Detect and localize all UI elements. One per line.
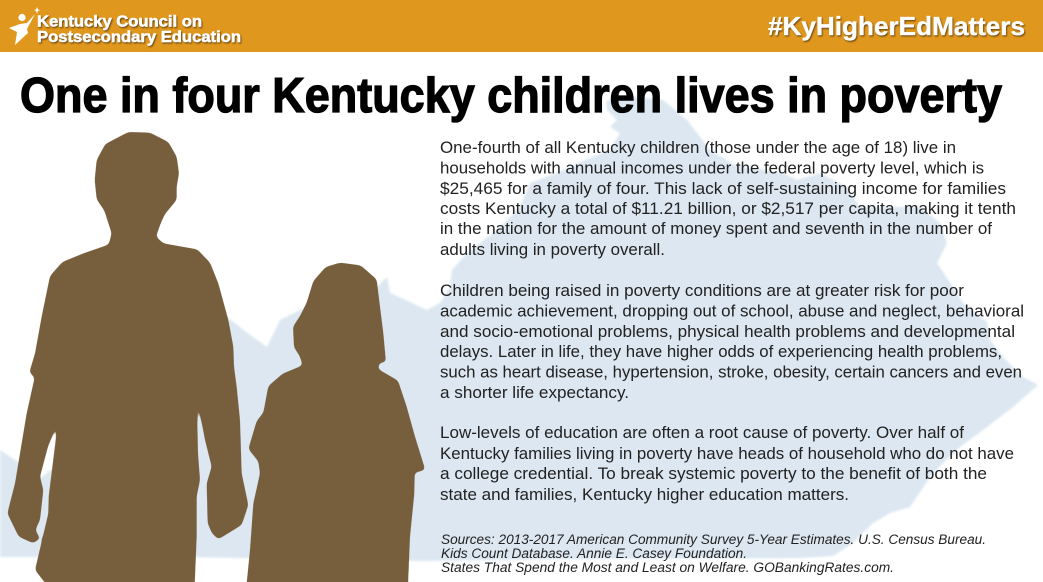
logo wordmark: Kentucky Council on bbox=[37, 14, 202, 30]
paragraph: risks for children: and socio-emotional problems, physical health problems and developmental bbox=[440, 323, 1015, 341]
paragraph: risks for children: delays. Later in life, they have higher odds of experiencing health problems, bbox=[440, 343, 1002, 361]
paragraph: risks for children: Children being raised in poverty conditions are at greater risk for poor bbox=[440, 282, 965, 300]
paragraph: education as root cause: Low-levels of education are often a root cause of poverty. Over half of bbox=[440, 424, 964, 442]
sources: Kids Count Database. Annie E. Casey Foundation. bbox=[441, 546, 747, 562]
paragraph: risks for children bbox=[440, 282, 1024, 402]
paragraph: education as root cause: state and families, Kentucky higher education matters. bbox=[440, 486, 849, 504]
paragraph: risks for children: a shorter life expectancy. bbox=[440, 384, 629, 402]
paragraph: poverty overview: households with annual incomes under the federal poverty level, which is bbox=[440, 160, 984, 178]
icon: Council star figure logo bbox=[9, 7, 40, 45]
logo wordmark: Postsecondary Education bbox=[37, 29, 241, 46]
paragraph: poverty overview: adults living in poverty overall. bbox=[440, 241, 665, 259]
paragraph: poverty overview: One-fourth of all Kentucky children (those under the age of 18) live in bbox=[440, 139, 956, 157]
paragraph: education as root cause: a college credential. To break systemic poverty to the benefit of both the bbox=[440, 465, 987, 483]
header band bbox=[0, 0, 1043, 52]
hashtag: #KyHigherEdMatters bbox=[768, 11, 1025, 41]
paragraph: risks for children: academic achievement, dropping out of school, abuse and neglect, behavioral bbox=[440, 302, 1024, 320]
paragraph: risks for children: such as heart disease, hypertension, stroke, obesity, certain cancers and even bbox=[440, 364, 1022, 382]
paragraph: education as root cause bbox=[440, 424, 1014, 504]
logo wordmark bbox=[37, 14, 241, 46]
silhouette: older boy bbox=[7, 132, 248, 582]
paragraph: poverty overview bbox=[440, 139, 1016, 259]
paragraph: poverty overview: costs Kentucky a total of $11.21 billion, or $2,517 per capita, making it tenth bbox=[440, 200, 1016, 218]
paragraph: education as root cause: Kentucky families living in poverty have heads of household who do not have bbox=[440, 445, 1014, 463]
sources: Sources: 2013-2017 American Community Survey 5-Year Estimates. U.S. Census Bureau. bbox=[441, 532, 986, 548]
sources: States That Spend the Most and Least on Welfare. GOBankingRates.com. bbox=[441, 560, 894, 576]
paragraph: poverty overview: in the nation for the amount of money spent and seventh in the number of bbox=[440, 220, 992, 238]
silhouette: younger girl bbox=[246, 263, 425, 582]
sources bbox=[441, 532, 986, 576]
paragraph: poverty overview: $25,465 for a family of four. This lack of self-sustaining income for families bbox=[440, 180, 1006, 198]
background map of Kentucky bbox=[0, 96, 1038, 561]
